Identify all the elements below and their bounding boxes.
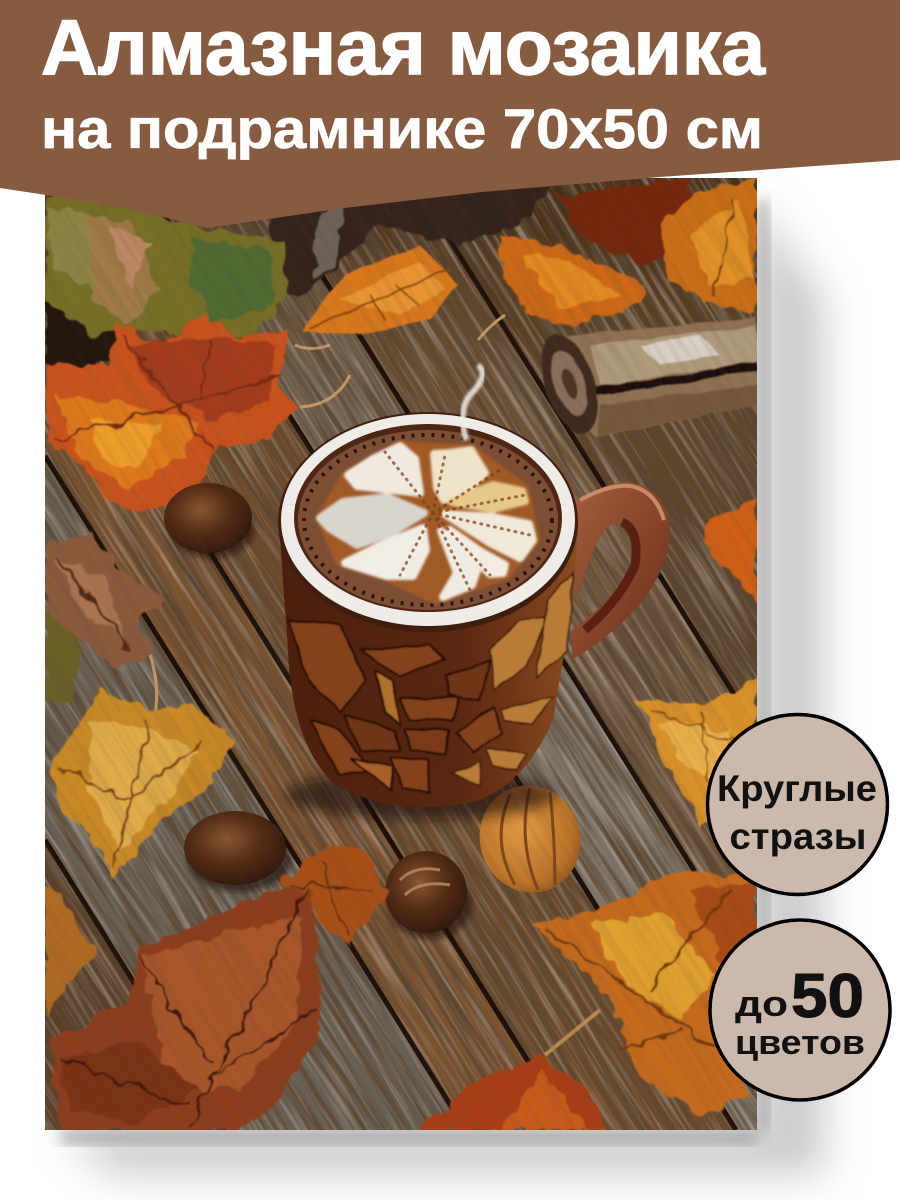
badge: up to 50 colours: до xyxy=(735,983,788,1024)
title heading: Алмазная мозаика xyxy=(41,3,766,91)
subtitle: на подрамнике 70х50 см xyxy=(41,97,763,160)
badge: up to 50 colours: 50 xyxy=(791,962,864,1031)
painterly streak overlay xyxy=(45,178,757,1130)
badge: round rhinestones: стразы xyxy=(730,816,866,857)
badge: round rhinestones xyxy=(708,714,888,894)
wooden planks xyxy=(45,178,757,1130)
top-right leaves xyxy=(499,178,757,328)
badge: round rhinestones: Круглые xyxy=(717,768,877,809)
orange top leaf xyxy=(302,245,458,335)
badge: up to 50 colours xyxy=(710,920,890,1100)
painting: autumn still life xyxy=(45,178,757,1130)
mug body xyxy=(279,525,578,807)
mug handle xyxy=(570,482,670,660)
large orange maple leaf, left xyxy=(45,315,298,515)
mug shadow xyxy=(285,771,555,819)
badge: up to 50 colours: цветов xyxy=(735,1024,865,1062)
yellow leaf, left xyxy=(50,690,235,880)
title banner xyxy=(0,0,900,228)
top dark background strip xyxy=(45,178,560,370)
leaf stem, bottom xyxy=(545,1010,600,1055)
log xyxy=(531,318,757,441)
right-side leaves xyxy=(420,500,757,1130)
mug xyxy=(278,365,670,819)
left brown leaf xyxy=(45,535,165,700)
bottom-left leaves xyxy=(45,850,385,1130)
mug rim xyxy=(278,412,578,632)
leaf stems xyxy=(150,315,505,715)
chestnuts and walnut xyxy=(164,483,594,939)
steam xyxy=(463,365,482,440)
whipped cream swirl xyxy=(318,443,538,602)
top-left green leaf xyxy=(45,195,285,335)
canvas shadow xyxy=(60,200,825,1175)
